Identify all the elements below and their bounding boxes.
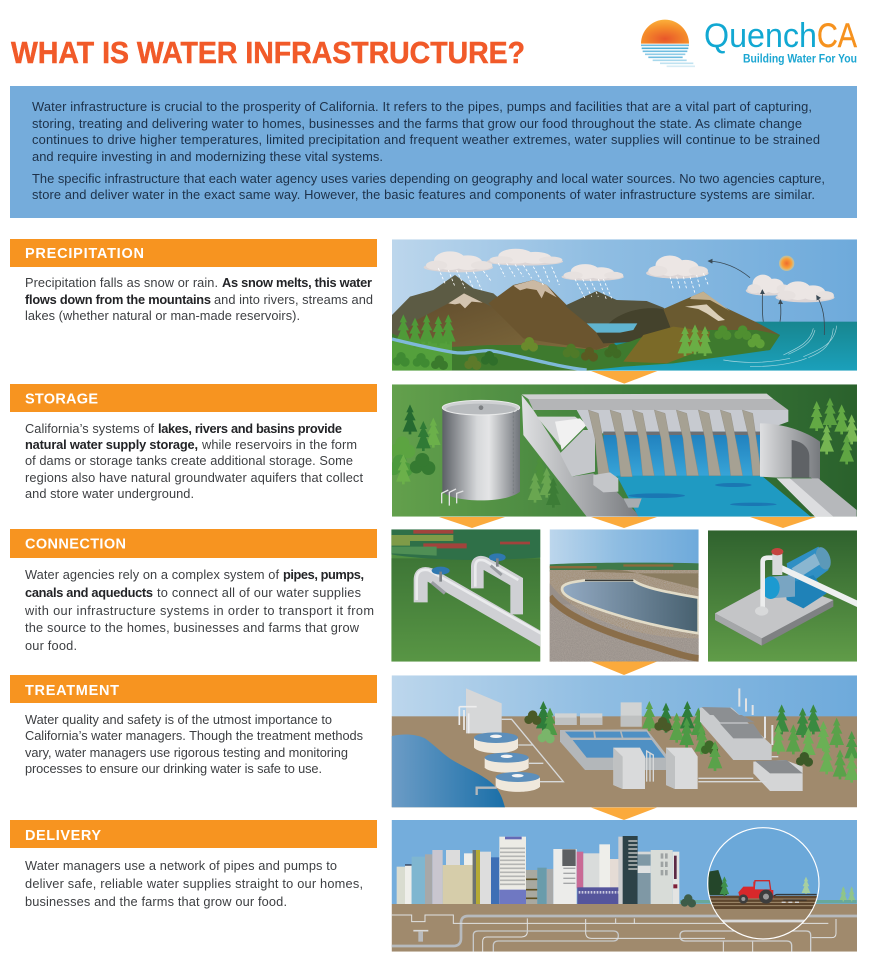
rain	[438, 263, 708, 300]
text: treatment: California’s water managers. Though the treatment methods	[25, 728, 363, 743]
title: WHAT IS WATER INFRASTRUCTURE?	[11, 35, 525, 70]
heading: treatment	[10, 675, 377, 703]
text: connection: pipes, pumps,	[283, 567, 364, 582]
heading: precipitation	[10, 239, 377, 267]
white pipes	[755, 548, 863, 616]
text: storage: lakes, rivers and basins provide	[158, 421, 342, 436]
text: connection: with our infrastructure systems in order to transport it from	[24, 603, 374, 618]
logo wordmark: CA: CA	[817, 17, 857, 55]
illustration: storage	[387, 384, 859, 517]
filter beds	[560, 729, 667, 770]
concrete slab	[715, 588, 834, 646]
section: connection	[10, 529, 377, 653]
text: connection	[24, 567, 374, 653]
heading: delivery	[10, 820, 377, 848]
valve	[413, 931, 428, 942]
bay	[392, 735, 505, 807]
text: connection: to connect all of our water supplies	[157, 585, 361, 600]
text: precipitation: and into rivers, streams and	[214, 292, 373, 307]
arrow: precipitation to storage	[591, 371, 657, 384]
arrow: storage to reservoir connection	[591, 517, 657, 528]
text: precipitation: lakes (whether natural or man-made reservoirs).	[25, 308, 300, 323]
mountains	[392, 275, 780, 351]
storage tank	[442, 400, 520, 506]
shrubs	[680, 886, 857, 907]
valley and forest	[392, 314, 780, 371]
text: precipitation: flows down from the mountains	[25, 292, 211, 307]
text: treatment: Water quality and safety is of the utmost importance to	[25, 712, 332, 727]
icon: sun over water	[641, 20, 695, 66]
tractor	[738, 881, 817, 904]
arrow: treatment to delivery	[591, 808, 657, 820]
text: delivery: Water managers use a network of pipes and pumps to	[25, 858, 337, 873]
text: precipitation: As snow melts, this water	[222, 275, 372, 290]
farm circle	[707, 827, 820, 941]
evaporation arrows	[708, 261, 824, 335]
settling basins	[474, 732, 540, 792]
text: storage: while reservoirs in the form	[201, 437, 357, 452]
clouds and sun	[424, 249, 834, 302]
panel: introduction	[10, 86, 857, 218]
arrow: storage to tank connection	[439, 517, 505, 528]
text: delivery	[25, 858, 363, 909]
heading: storage: STORAGE	[25, 392, 98, 408]
text: storage: regions also have natural groundwater aquifers that collect	[25, 470, 363, 485]
pipe one	[417, 567, 547, 642]
heading: connection: CONNECTION	[25, 536, 126, 552]
underground pipes	[392, 915, 857, 952]
heading: delivery: DELIVERY	[25, 828, 101, 844]
logo wordmark: Quench	[704, 17, 817, 55]
section: delivery	[10, 820, 377, 909]
text: precipitation: Precipitation falls as snow or rain.	[25, 275, 218, 290]
text: delivery: deliver safe, reliable water supplies straight to our homes,	[25, 876, 363, 891]
section: treatment	[10, 675, 377, 776]
text: storage: natural water supply storage,	[25, 437, 198, 452]
intro paragraph 1: continues to drive higher temperatures, limited precipitation and frequent weather extremes, water supplies will continue to be strained	[32, 132, 820, 147]
arrow: connection to treatment	[591, 662, 657, 675]
intro paragraph 1: storing, treating and delivering water to homes, businesses and the farms that grow our food throughout the state. As climate change	[32, 116, 802, 131]
illustration: precipitation	[392, 239, 857, 384]
intro paragraph 2: The specific infrastructure that each water agency uses varies depending on geography and local water sources. No two agencies capture,	[32, 171, 825, 186]
text: connection: our food.	[25, 638, 77, 653]
text: treatment: vary, water managers use rigorous testing and monitoring	[25, 745, 348, 760]
heading: precipitation: PRECIPITATION	[25, 246, 144, 262]
pump motor	[765, 546, 831, 608]
heading: storage	[10, 384, 377, 412]
section: storage	[10, 384, 377, 501]
text: storage: California’s systems of	[25, 421, 154, 436]
illustration: reservoir	[550, 529, 699, 662]
text: storage	[25, 421, 363, 501]
heading: connection	[10, 529, 377, 558]
text: connection: the source to the homes, businesses and farms that grow	[25, 620, 360, 635]
filter buildings	[613, 748, 698, 789]
reservoir water	[562, 580, 699, 633]
connecting pipes	[477, 719, 778, 795]
text: treatment	[25, 712, 363, 776]
trees	[387, 398, 859, 508]
text: delivery: businesses and the farms that grow our food.	[25, 894, 287, 909]
intro paragraph 1: Water infrastructure is crucial to the prosperity of California. It refers to the pipes, pumps and facilities that are a vital part of capturing,	[32, 99, 812, 114]
intro paragraph 2: store and deliver water in the exact same way. However, the basic features and components of water infrastructure systems are similar.	[32, 187, 815, 202]
text: storage: and store water underground.	[25, 486, 194, 501]
pipe two	[475, 553, 518, 614]
intro paragraph 1	[32, 99, 820, 164]
text: storage: of dams or storage tanks create additional storage. Some	[25, 453, 353, 468]
text: treatment: processes to ensure our drinking water is safe to use.	[25, 761, 322, 776]
dam	[522, 394, 857, 517]
city skyline	[397, 836, 679, 904]
distant fields	[391, 529, 540, 560]
illustration: pump	[708, 530, 863, 662]
intro paragraph 1: and require investing in and modernizing these vital systems.	[32, 149, 383, 164]
plant buildings	[459, 688, 803, 791]
forest	[524, 701, 859, 783]
intro paragraph 2	[32, 171, 825, 202]
heading: treatment: TREATMENT	[25, 683, 119, 699]
text: connection: canals and aqueducts	[25, 585, 153, 600]
text: precipitation	[25, 275, 373, 323]
arrow: storage to pump connection	[750, 517, 816, 528]
logo: QuenchCA	[641, 17, 857, 66]
illustration: treatment	[392, 675, 859, 807]
section: precipitation	[10, 239, 377, 323]
illustration: delivery	[392, 820, 857, 952]
text: connection: Water agencies rely on a complex system of	[25, 567, 279, 582]
illustration: pipes	[391, 529, 547, 662]
waves	[723, 326, 837, 367]
